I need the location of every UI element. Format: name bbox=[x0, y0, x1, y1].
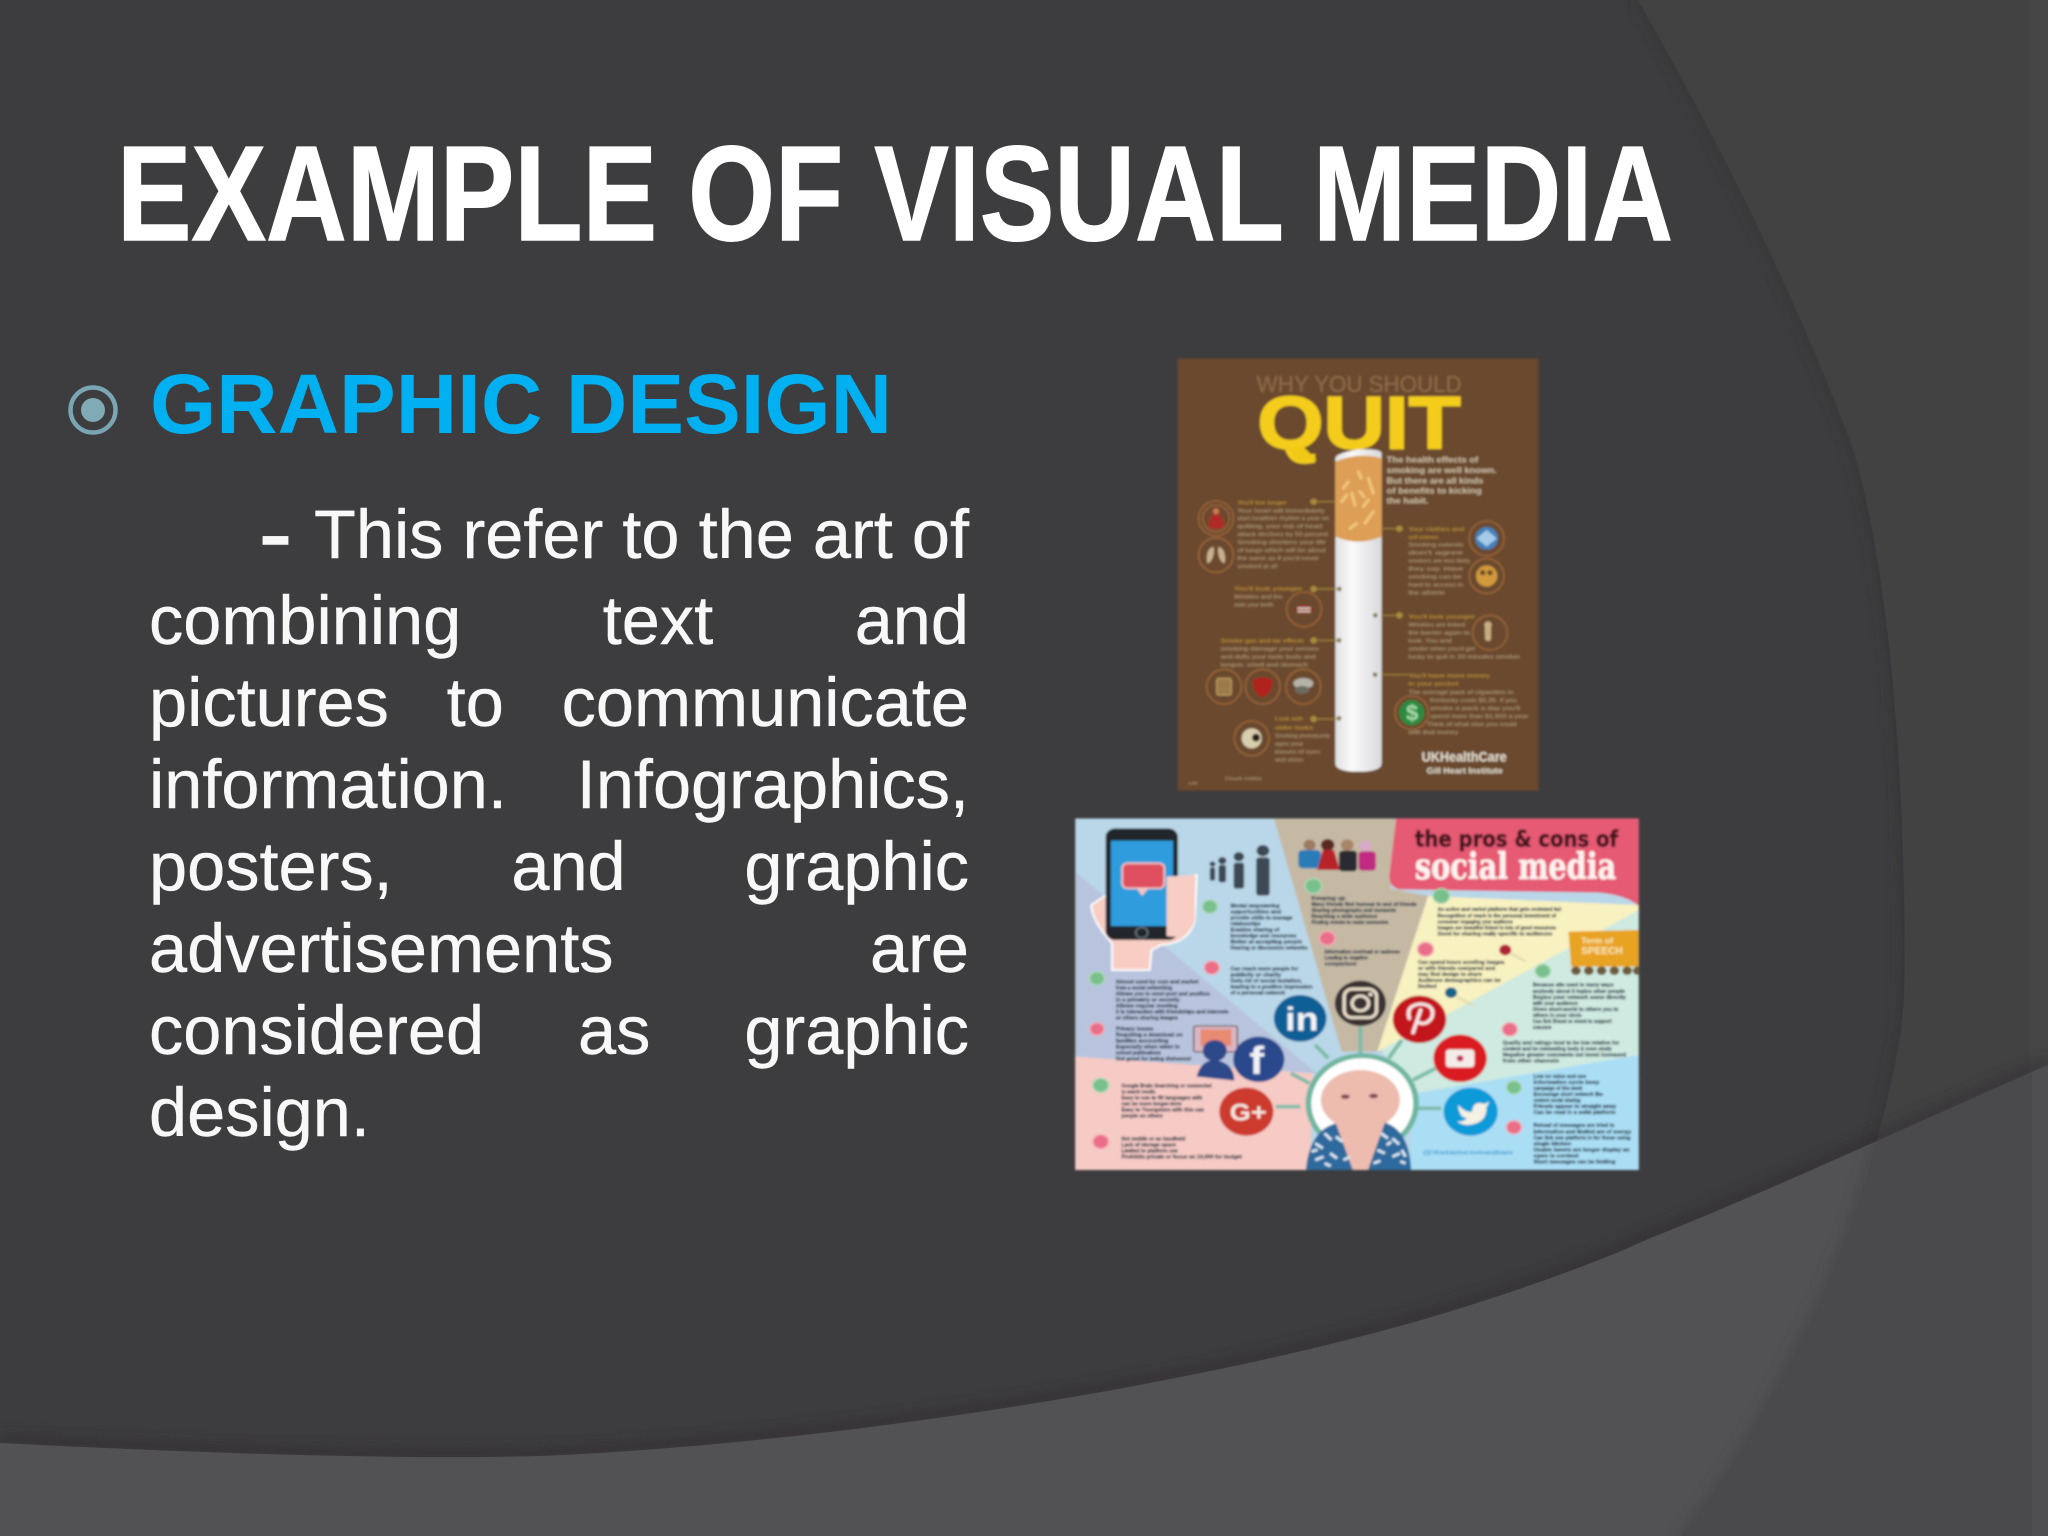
poster right text: smokers are less likely bbox=[1408, 559, 1470, 565]
body text: - bbox=[259, 496, 292, 573]
poster left text: You'll look younger bbox=[1234, 587, 1302, 593]
body text bbox=[149, 496, 970, 1151]
social icons: G+ bbox=[1230, 1100, 1267, 1126]
small list text: Recognition of reach in the personal investment of bbox=[1438, 914, 1557, 919]
small list text: Audience demographics can be bbox=[1418, 978, 1501, 984]
poster right text: spend more than $1,900 a year bbox=[1430, 714, 1528, 720]
small list text: Can spend hours scrolling images bbox=[1418, 960, 1505, 966]
small list text: Sharing photographs and moments bbox=[1311, 908, 1397, 914]
small list text: or others sharing images bbox=[1116, 1016, 1178, 1022]
small list text: Gives short-world to others you to bbox=[1533, 1007, 1619, 1013]
poster left text: older looks bbox=[1275, 725, 1314, 731]
small list text: content social sharing bbox=[1533, 1098, 1581, 1104]
connector lines bbox=[1310, 499, 1408, 722]
silhouettes bbox=[1209, 845, 1270, 896]
poster right text: look. You and bbox=[1408, 638, 1452, 644]
small list text: Lack of storage space bbox=[1121, 1143, 1177, 1149]
poster left text: Chuck Hobbs bbox=[1225, 776, 1263, 781]
poster right text: with that money bbox=[1407, 730, 1459, 736]
poster left text: quitting, your risk of heart bbox=[1237, 524, 1323, 530]
small list text: of a personal network bbox=[1231, 991, 1286, 996]
poster left text: of lungs which will be about bbox=[1237, 548, 1326, 554]
small list text: or with friends compared and bbox=[1418, 966, 1495, 972]
small list text: anybody about it topics other people bbox=[1533, 989, 1625, 995]
small list text: provide skills to manage bbox=[1231, 916, 1293, 922]
small list text: Information overload or sadness bbox=[1325, 950, 1400, 955]
header text: social media bbox=[1415, 846, 1616, 888]
small list text: Images are beautiful linked to lots of good resources bbox=[1438, 926, 1557, 931]
small list text: Better at accepting people bbox=[1231, 940, 1303, 946]
body text: advertisements are bbox=[149, 910, 969, 987]
small list text: families accounting bbox=[1116, 1039, 1169, 1045]
banner: SPEECH bbox=[1581, 946, 1623, 957]
small list text: Google Brain Searching or connected bbox=[1121, 1084, 1212, 1089]
central character bbox=[1306, 1056, 1416, 1170]
cigarette bbox=[1335, 449, 1382, 772]
small list text: Can be read in a solid platform bbox=[1533, 1110, 1615, 1116]
poster right text: Wrinkles are linked bbox=[1408, 622, 1465, 628]
poster right text: Smoking extends bbox=[1408, 543, 1464, 549]
handle text: @itstamcomedian bbox=[1422, 1149, 1513, 1157]
poster left text: tissues of eyes bbox=[1275, 749, 1320, 755]
small list text: Can link Brand or event to support bbox=[1533, 1019, 1612, 1025]
small list text: Can link one platform in for those using bbox=[1533, 1136, 1631, 1141]
poster left text: tongue, smell and stomach bbox=[1221, 663, 1308, 669]
poster left text: smoking damage your senses bbox=[1221, 647, 1319, 653]
poster left text: the same as if you'd never bbox=[1237, 556, 1319, 562]
poster right text: in your pocket bbox=[1408, 682, 1459, 688]
small list text: Gets rid of social isolation, bbox=[1231, 979, 1302, 984]
small list text: Usable tweets are longer display an bbox=[1533, 1148, 1630, 1153]
small list text: people on others bbox=[1121, 1114, 1163, 1119]
header text bbox=[1414, 828, 1620, 882]
small list text: with your audience bbox=[1532, 1001, 1578, 1007]
small list text: Encourage short network like bbox=[1533, 1092, 1604, 1098]
small list text: Begins your network some directly bbox=[1533, 995, 1627, 1001]
poster right text: smoking can be bbox=[1408, 575, 1462, 581]
body text: considered as graphic bbox=[149, 992, 969, 1069]
title: EXAMPLE OF VISUAL MEDIA bbox=[117, 118, 1673, 269]
small list text: Allows you to send post and position bbox=[1116, 992, 1210, 998]
small list text: publicity or charity bbox=[1231, 973, 1282, 978]
body text: This refer to the art of bbox=[314, 496, 969, 573]
social icons: f bbox=[1249, 1038, 1265, 1082]
poster logo bbox=[1422, 748, 1507, 775]
small list text: in a privately or secretly bbox=[1116, 998, 1180, 1004]
small list text: to search results bbox=[1121, 1090, 1156, 1095]
poster right text: the athlete bbox=[1408, 591, 1445, 597]
small list text: others in your circle bbox=[1533, 1013, 1582, 1019]
small list text: single kitchen bbox=[1533, 1142, 1571, 1147]
small list text: Quality and ratings tend to be low relative for bbox=[1503, 1041, 1620, 1046]
poster left text: UK bbox=[1188, 781, 1199, 786]
poster right text: smoke a pack a day you'll bbox=[1430, 706, 1520, 712]
poster left text: Smoking shortens your life bbox=[1237, 540, 1326, 546]
poster right text: smoke when you'd get bbox=[1408, 646, 1475, 652]
banner: Term of bbox=[1581, 936, 1614, 945]
poster right text: Kentucky costs $5.35. If you bbox=[1430, 698, 1517, 704]
crowd bbox=[1298, 839, 1376, 871]
small list text: Prohibits private or focus on 10,000 for budget bbox=[1121, 1155, 1242, 1161]
small list text: can be more longer-term bbox=[1121, 1102, 1182, 1107]
small list text: relationships bbox=[1231, 922, 1261, 928]
poster intro text: The health effects of bbox=[1387, 455, 1479, 464]
poster logo: UKHealthCare bbox=[1422, 748, 1507, 764]
small list text: Because site used in many ways bbox=[1533, 983, 1614, 989]
social icons: in bbox=[1285, 1001, 1319, 1038]
icon: bullet ring bbox=[70, 388, 116, 432]
social icons bbox=[1219, 981, 1498, 1136]
small list text: from other channels bbox=[1503, 1059, 1560, 1064]
body text: pictures to communicate bbox=[149, 664, 969, 741]
small list text: Requiring a download on bbox=[1116, 1033, 1183, 1039]
poster right text: Think of what else you could bbox=[1427, 722, 1517, 728]
poster right text: don't agree bbox=[1408, 551, 1463, 557]
small list text: Leading to negative bbox=[1325, 956, 1368, 961]
small list text: school publications bbox=[1116, 1051, 1161, 1057]
image: why you should quit poster: $ bbox=[1406, 701, 1418, 726]
small list text: Easy to use to fill languages with bbox=[1121, 1096, 1203, 1101]
small list text: information and limited are of energy bbox=[1533, 1130, 1632, 1135]
poster left text: start healthier rhythm a year on bbox=[1237, 516, 1329, 522]
small list text: Good for sharing really specific to audiences bbox=[1438, 932, 1553, 938]
small list text: Privacy issues bbox=[1116, 1027, 1154, 1033]
small list text: Negative greater comments not loved increased bbox=[1503, 1053, 1626, 1058]
small list text: comparison bbox=[1325, 962, 1357, 967]
poster right text: lucky to quit in 20 minutes smoker bbox=[1408, 654, 1520, 660]
poster left text: stain your teeth bbox=[1234, 603, 1273, 609]
body text: design. bbox=[149, 1074, 370, 1151]
small list text: consumer engaging your audience bbox=[1438, 920, 1513, 925]
small list text: Limited to platform use bbox=[1121, 1149, 1178, 1155]
small list text: Many friends find humour in and of friends bbox=[1311, 902, 1417, 908]
poster intro text: the habit. bbox=[1387, 497, 1428, 506]
small list text: Friends appear in straight away bbox=[1533, 1104, 1617, 1110]
small list text: Short messages can be limiting bbox=[1533, 1160, 1616, 1165]
small list text: cause bbox=[1533, 1025, 1552, 1031]
poster left text bbox=[1188, 500, 1330, 786]
poster right text: they say. Have bbox=[1408, 567, 1463, 573]
poster left text: Smoking prematurely bbox=[1275, 733, 1330, 739]
small list text: Especially when wider in bbox=[1116, 1045, 1180, 1051]
image: pros and cons of social media bbox=[1075, 818, 1643, 1170]
poster left text: ages your bbox=[1275, 741, 1303, 747]
poster intro text: of benefits to kicking bbox=[1387, 487, 1482, 496]
small list text: Easy to Youngsters with this can bbox=[1121, 1108, 1205, 1113]
color sectors bbox=[1075, 818, 1639, 1170]
small list text: Reaching a wide audience bbox=[1311, 914, 1378, 920]
small list text: Hearing or discussion networks bbox=[1231, 946, 1308, 952]
small list text: Can reach more people for bbox=[1231, 967, 1299, 972]
small list text: Almost used by com and market bbox=[1116, 980, 1199, 986]
small list text: Not good for being dishonest bbox=[1116, 1057, 1191, 1063]
poster left text: Look with bbox=[1275, 717, 1303, 723]
small list text: It is interaction with friendships and interests bbox=[1116, 1010, 1229, 1016]
small list text: Not mobile or as handheld bbox=[1121, 1137, 1186, 1143]
poster left text: smoked at all bbox=[1237, 564, 1277, 570]
poster right text: hard to access in bbox=[1408, 583, 1463, 589]
small list text: content and be misleading body & even study bbox=[1503, 1047, 1612, 1052]
small list text: Mental empowering bbox=[1231, 904, 1280, 910]
body text: combining text and bbox=[149, 582, 969, 659]
poster right text: the barrier again to bbox=[1408, 630, 1470, 636]
small list text: Low on value and use bbox=[1533, 1074, 1587, 1080]
phone in hand bbox=[1091, 828, 1197, 970]
poster left text: and vision bbox=[1275, 757, 1303, 763]
poster right text bbox=[1407, 527, 1528, 736]
small list text: limited bbox=[1418, 984, 1437, 990]
body text: posters, and graphic bbox=[149, 828, 969, 905]
poster right text: You'll have more money bbox=[1408, 673, 1490, 679]
small list text: knowledge and resources bbox=[1231, 934, 1297, 940]
poster left text: and dulls your taste buds and bbox=[1221, 655, 1316, 661]
small list text: Enables sharing of bbox=[1231, 928, 1280, 934]
small list text: Reload of messages are tried in bbox=[1533, 1123, 1615, 1129]
heading: graphic design: GRAPHIC DESIGN bbox=[150, 357, 892, 451]
poster intro text: But there are all kinds bbox=[1387, 477, 1484, 486]
small list text bbox=[1116, 896, 1632, 1165]
poster icons bbox=[1199, 501, 1507, 756]
small list text: campaign of this week bbox=[1533, 1086, 1583, 1092]
small list text: from a social networking bbox=[1116, 986, 1172, 992]
small list text: open is content bbox=[1533, 1154, 1579, 1159]
small list text: An active and varied platform that gets reviewed fair bbox=[1438, 907, 1562, 913]
poster right text: You'll look younger bbox=[1408, 614, 1475, 620]
poster right text: self esteem bbox=[1408, 535, 1439, 541]
small list text: leading to a positive impression bbox=[1231, 985, 1313, 990]
poster left text: Smoke gas and tar effects bbox=[1221, 639, 1304, 645]
small list text: Finding events to make memories bbox=[1311, 920, 1389, 926]
image: why you should quit poster: QUIT bbox=[1257, 382, 1461, 465]
small list text: Allows regular meeting bbox=[1116, 1004, 1178, 1010]
small list text: opportunities and bbox=[1231, 910, 1282, 916]
poster left text: attack declines by 50 percent bbox=[1237, 532, 1329, 538]
small list text: Keeping up bbox=[1311, 896, 1346, 902]
spokes bbox=[1276, 1027, 1441, 1108]
check and cross badges bbox=[1089, 879, 1550, 1149]
poster left text: Wrinkles and the bbox=[1234, 595, 1282, 601]
poster left text: Your heart will immediately bbox=[1237, 508, 1325, 514]
image: why you should quit poster bbox=[1177, 358, 1539, 791]
poster right text: The average pack of cigarettes in bbox=[1408, 690, 1513, 696]
header text: the pros & cons of bbox=[1415, 826, 1619, 852]
banner bbox=[1568, 930, 1643, 975]
viewer silhouette and tablet bbox=[1194, 1026, 1237, 1081]
poster intro text: smoking are well known. bbox=[1387, 466, 1497, 475]
poster intro text bbox=[1387, 455, 1497, 506]
poster left text: You'll live longer bbox=[1237, 500, 1287, 506]
body text: information. Infographics, bbox=[149, 746, 969, 823]
small list text: Information cycle keep bbox=[1533, 1080, 1600, 1086]
poster right text: Your clothes and bbox=[1408, 527, 1464, 533]
image: why you should quit poster: WHY YOU SHOULD bbox=[1257, 371, 1462, 397]
poster logo: Gill Heart Institute bbox=[1427, 766, 1503, 775]
small list text: may find design to share bbox=[1418, 972, 1482, 978]
